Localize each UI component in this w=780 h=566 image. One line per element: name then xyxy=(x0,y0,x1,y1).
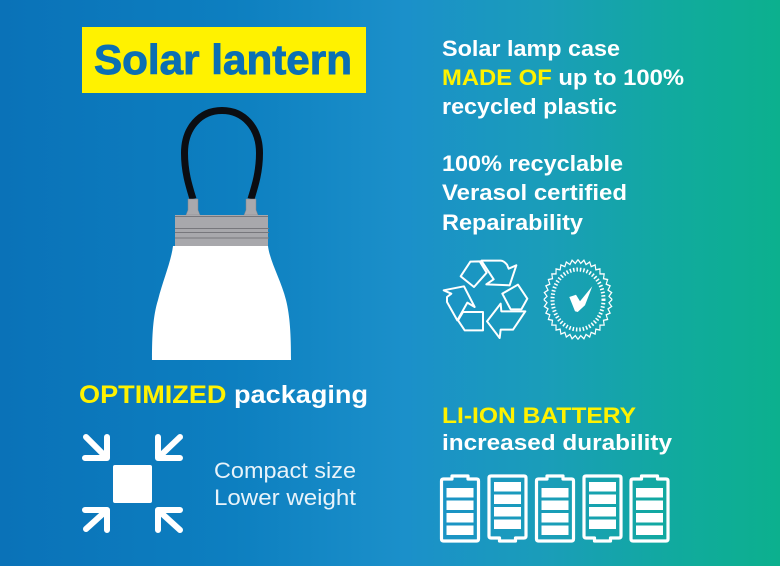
heading: solar lamp case: Solar lamp case xyxy=(442,36,620,61)
icon: recycling symbol xyxy=(444,261,527,338)
battery 3 xyxy=(536,476,574,541)
icon: batteries xyxy=(442,476,668,541)
center square xyxy=(113,465,152,503)
text: verasol certified: Verasol certified xyxy=(442,180,627,205)
title: Solar lantern xyxy=(94,36,352,83)
lantern handle xyxy=(184,110,260,199)
text: repairability: Repairability xyxy=(442,210,584,235)
text: recycled plastic: recycled plastic xyxy=(442,94,617,119)
seal zigzag outline xyxy=(544,260,612,339)
text: 100% recyclable: 100% recyclable xyxy=(442,151,623,176)
seal check mark xyxy=(569,286,592,312)
icon: compact arrows xyxy=(85,437,180,530)
heading: made of recycled plastic: MADE OF up to 100% xyxy=(442,65,684,90)
lantern connectors xyxy=(186,199,258,215)
text: lower weight: Lower weight xyxy=(214,485,356,510)
lantern body xyxy=(152,246,291,360)
heading: optimized packaging: OPTIMIZED packaging xyxy=(79,381,368,409)
battery 4 xyxy=(584,476,621,541)
title xyxy=(82,27,366,93)
illustration: solar lantern xyxy=(152,110,291,360)
seal dashed ring xyxy=(552,270,604,330)
heading: li-ion battery: LI-ION BATTERY xyxy=(442,403,636,428)
text: increased durability: increased durability xyxy=(442,430,673,455)
battery 5 xyxy=(631,476,668,541)
battery 2 xyxy=(489,476,526,541)
inward arrows xyxy=(85,437,180,530)
lantern collar xyxy=(175,215,269,246)
text: compact size: Compact size xyxy=(214,458,356,483)
icon: certified seal xyxy=(544,260,612,339)
battery 1 xyxy=(442,476,478,541)
